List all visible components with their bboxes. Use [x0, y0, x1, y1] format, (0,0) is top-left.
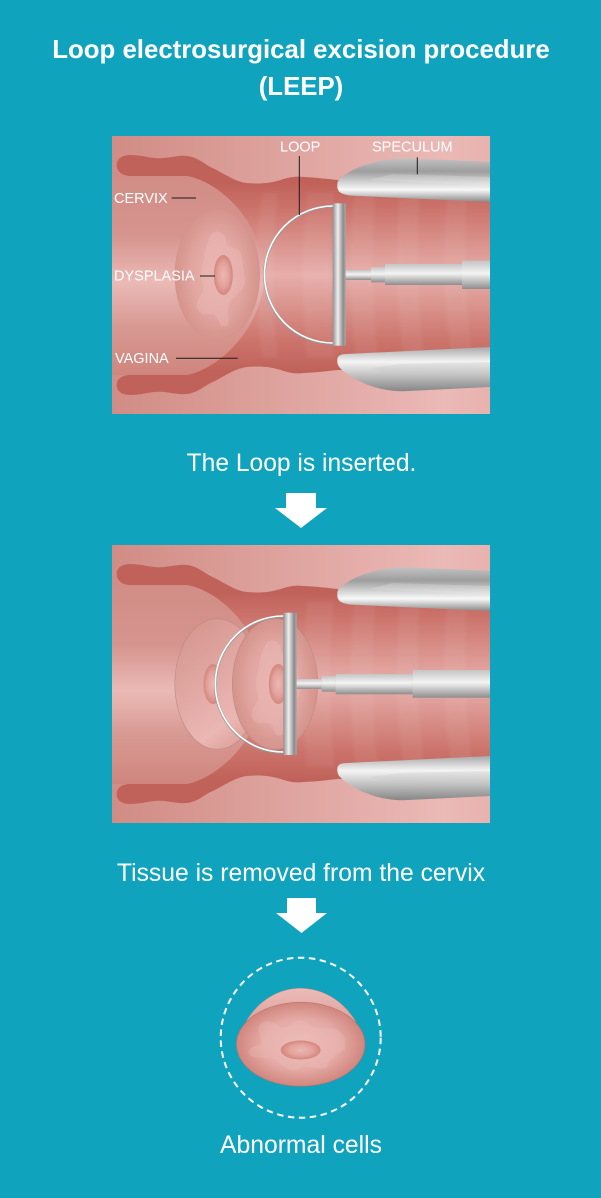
dashed circle [221, 958, 381, 1118]
cervical opening [268, 664, 284, 704]
cervical opening [214, 255, 233, 295]
dysplasia disc [174, 219, 260, 324]
removed tissue lens, right [232, 618, 318, 750]
caption: tissue removed: Tissue is removed from the cervix [117, 860, 486, 887]
label: speculum: SPECULUM [372, 140, 453, 156]
abnormal cells illustration [221, 958, 381, 1118]
tissue front face [236, 1002, 365, 1086]
lighter tissue blob [197, 231, 245, 327]
tissue back dome [246, 988, 356, 1022]
label: dysplasia: DYSPLASIA [114, 268, 195, 284]
handle rod [346, 261, 490, 289]
loop wire [215, 616, 283, 752]
vaginal canal walls [117, 155, 490, 395]
label: vagina: VAGINA [115, 351, 169, 367]
pointer lines [172, 156, 417, 358]
speculum bottom blade [337, 347, 490, 391]
canal ribs [257, 192, 472, 358]
lighter tissue blob [249, 1020, 345, 1070]
panel: loop inserted [112, 136, 490, 414]
caption: loop inserted: The Loop is inserted. [187, 450, 416, 477]
lighter tissue blob [252, 640, 300, 736]
bottom blade highlight [386, 362, 490, 366]
title: Loop electrosurgical excision procedure [52, 36, 550, 64]
handle rod [297, 670, 490, 698]
bottom blade highlight [386, 771, 490, 776]
loop wire [264, 206, 333, 344]
loop handle bar [283, 613, 297, 755]
label: loop: LOOP [280, 140, 320, 156]
faded opening, left [204, 664, 216, 704]
top blade highlight [372, 174, 490, 182]
vaginal canal walls [117, 564, 490, 804]
panel: tissue removed [112, 545, 490, 823]
caption: abnormal cells: Abnormal cells [220, 1132, 382, 1159]
removed tissue lens, left [174, 618, 246, 750]
panel background [112, 545, 490, 823]
speculum top blade [337, 567, 490, 611]
speculum bottom blade [337, 756, 490, 800]
title second line: (LEEP) [259, 73, 343, 101]
speculum top blade [337, 158, 490, 202]
arrow 2 [276, 898, 327, 933]
infographic canvas [54, 39, 549, 1153]
label: cervix: CERVIX [114, 191, 168, 207]
top blade highlight [372, 583, 490, 590]
cervical opening [281, 1040, 321, 1060]
canal ribs [303, 601, 472, 767]
cervix [112, 585, 248, 784]
cervix [112, 176, 264, 375]
arrow 1 [275, 493, 327, 528]
loop handle bar [333, 203, 346, 346]
panel background [112, 136, 490, 414]
